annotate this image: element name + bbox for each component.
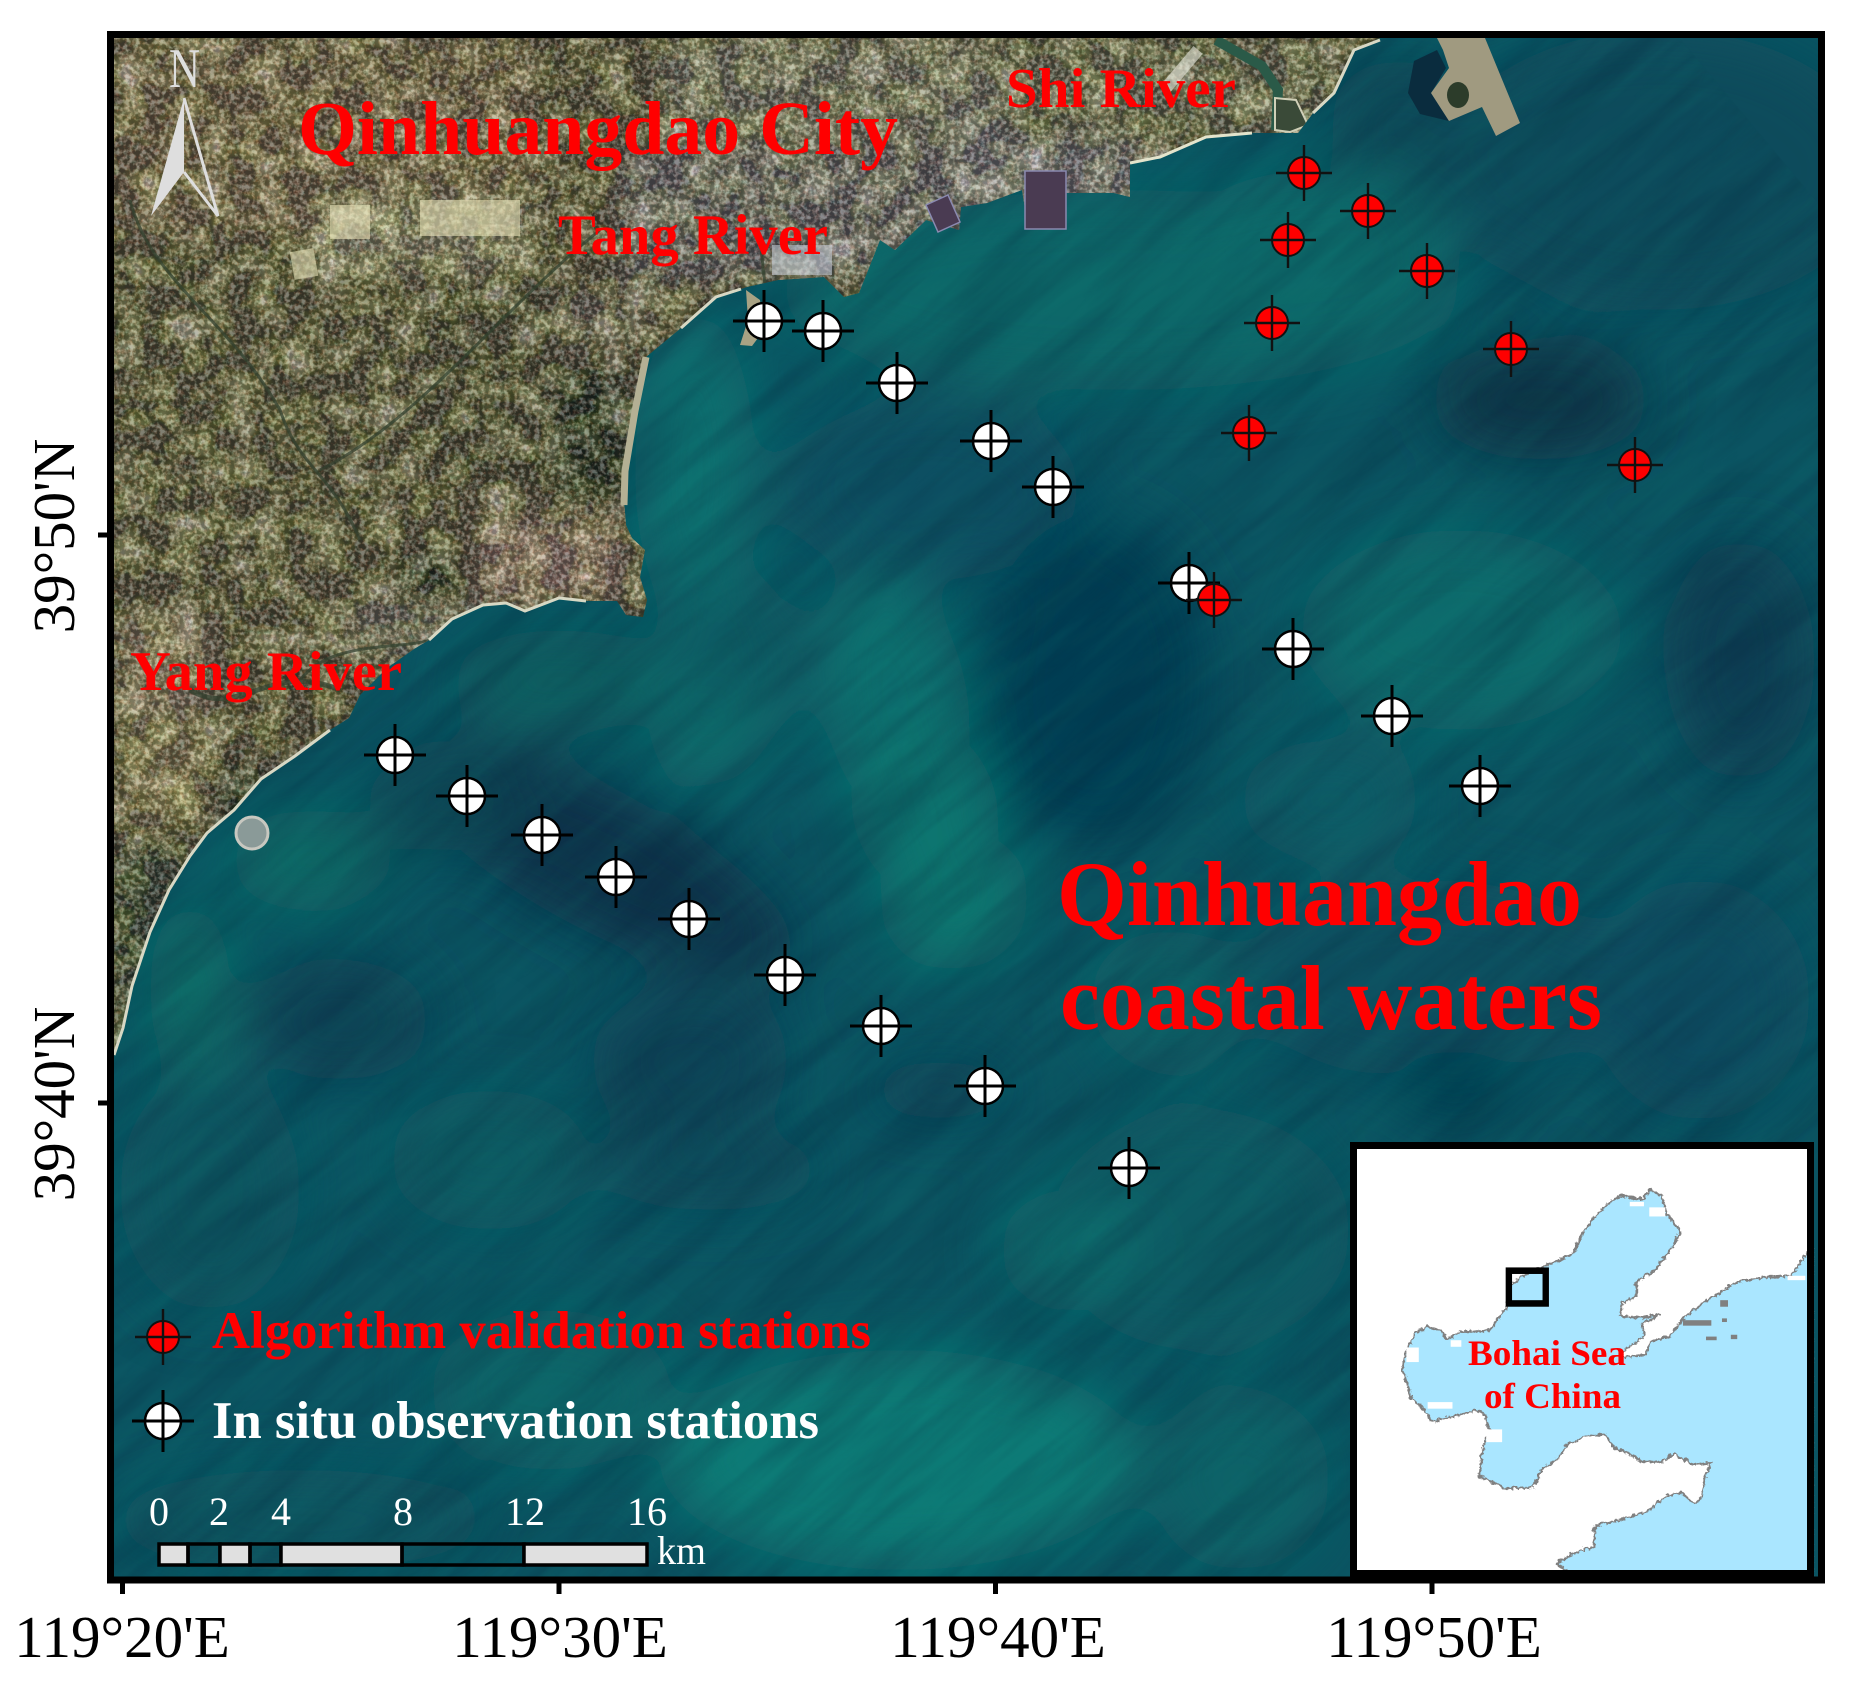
x axis labels: 119°30'E (452, 1604, 668, 1670)
scale numbers: 8 (393, 1489, 413, 1534)
inset coastline (1401, 1187, 1811, 1573)
label: Tang River: Tang River (558, 204, 828, 267)
land fine texture (114, 38, 1394, 1058)
artificial island (236, 817, 268, 849)
label: Qinhuangdao City: Qinhuangdao City (298, 87, 898, 171)
legend marker: validation (135, 1309, 191, 1365)
inset study area box (1509, 1271, 1546, 1303)
Shi River channel (1216, 40, 1278, 130)
label: Qinhuangdao coastal waters (1057, 843, 1602, 1049)
legend marker: in situ (132, 1390, 194, 1452)
shoreline beach strokes (114, 40, 1380, 1055)
x axis labels: 119°50'E (1326, 1604, 1542, 1670)
land texture (114, 38, 1394, 1058)
inset islands (1683, 1300, 1737, 1340)
coal yards (926, 171, 1066, 232)
scale segments (159, 1544, 647, 1565)
rivers and roads (130, 200, 770, 699)
scale numbers: 4 (271, 1489, 291, 1534)
label: Qinhuangdao coastal waters: Qinhuangdao (1057, 843, 1582, 945)
inset sea (1401, 1187, 1811, 1573)
scale numbers: 12 (505, 1489, 545, 1534)
scale numbers: 16 (627, 1489, 667, 1534)
scale numbers: 0 (149, 1489, 169, 1534)
land colour zones (114, 38, 1340, 1040)
inset locator map (1350, 1142, 1814, 1577)
x axis labels: 119°20'E (14, 1604, 230, 1670)
scale numbers: 2 (209, 1489, 229, 1534)
legend (132, 1302, 871, 1452)
land (114, 38, 1394, 1058)
inset label: Bohai Sea (1468, 1333, 1626, 1373)
north arrow (151, 38, 218, 216)
y axis labels: 39°40'N (21, 1007, 87, 1201)
north arrow: N (169, 38, 200, 100)
axis ticks (98, 535, 1432, 1594)
label: Shi River: Shi River (1006, 58, 1236, 120)
place labels (130, 58, 1602, 1049)
inset background (1350, 1142, 1814, 1577)
offshore port (1408, 38, 1520, 136)
inset shoreline gaps (1406, 1202, 1805, 1442)
label: Yang River: Yang River (130, 641, 402, 703)
x axis labels: 119°40'E (890, 1604, 1106, 1670)
harbour spit (740, 290, 764, 346)
label: Qinhuangdao coastal waters: coastal waters (1060, 947, 1602, 1049)
legend label: validation: Algorithm validation stations (212, 1302, 871, 1360)
legend label: in situ: In situ observation stations (212, 1392, 819, 1450)
scale numbers (149, 1489, 667, 1534)
industrial blocks (290, 46, 1203, 280)
inset label: of China (1484, 1376, 1621, 1416)
in situ observation stations (364, 290, 1511, 1199)
scale bar (149, 1489, 706, 1573)
inset label (1468, 1333, 1626, 1416)
tidal pond (1275, 98, 1308, 132)
algorithm validation stations (1186, 145, 1663, 628)
x axis labels (14, 1604, 1542, 1670)
sea light streak texture (223, 252, 1817, 1296)
inset frame (1354, 1146, 1810, 1574)
scale unit: km (657, 1528, 706, 1573)
y axis labels: 39°50'N (21, 439, 87, 633)
y axis labels (21, 439, 87, 1201)
